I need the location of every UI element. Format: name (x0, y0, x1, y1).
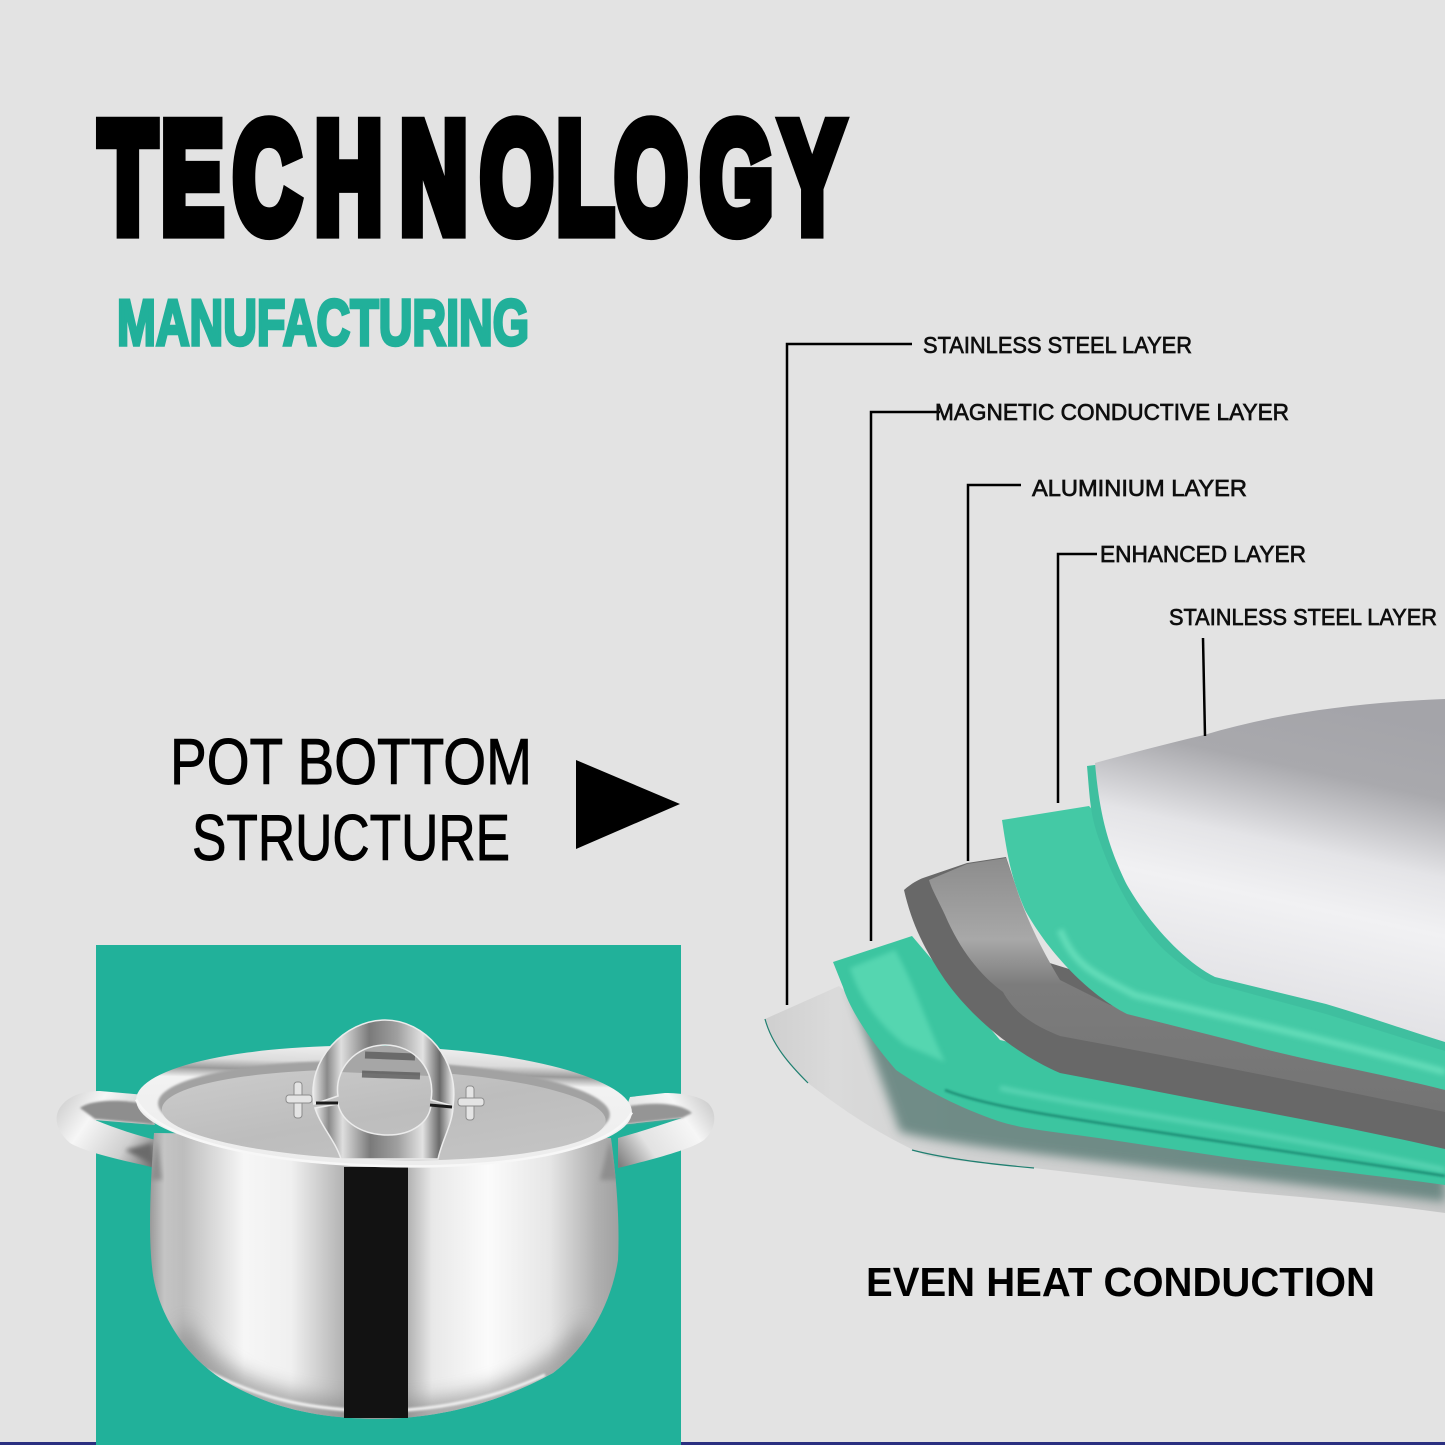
bottom navy strip (0, 1442, 1445, 1445)
ring upper arc (313, 1020, 454, 1106)
heading: pot bottom structure: STRUCTURE (192, 801, 510, 874)
heading: pot bottom structure: POT BOTTOM (170, 725, 532, 798)
panel: teal square behind pot (96, 945, 681, 1445)
layer labels: ENHANCED LAYER (1100, 541, 1306, 567)
layer labels: ALUMINIUM LAYER (1032, 475, 1247, 501)
layer labels: MAGNETIC CONDUCTIVE LAYER (935, 399, 1289, 425)
layer labels (923, 332, 1437, 630)
layer labels: STAINLESS STEEL LAYER (1169, 604, 1437, 630)
diagram: exploded pot-bottom layers (765, 699, 1445, 1213)
layer: enhanced (green) (1002, 806, 1445, 1090)
ring window reflections (340, 1046, 430, 1076)
top silver surface (1095, 699, 1445, 1042)
left handle (57, 1091, 156, 1168)
lid knob ring (286, 1020, 484, 1159)
green highlight (850, 950, 945, 1062)
layer: bottom stainless steel (765, 986, 1445, 1213)
arrow: triangle pointer (576, 760, 680, 849)
icon: stainless steel pot (57, 1020, 714, 1430)
shadow band on bottom layer (850, 985, 1445, 1202)
right handle (618, 1093, 714, 1168)
layer: magnetic conductive (green) (833, 936, 1445, 1185)
pin right (458, 1086, 484, 1120)
ring lower base (315, 1104, 453, 1159)
caption: even heat conduction: EVEN HEAT CONDUCTION (866, 1259, 1375, 1305)
layer: aluminium (gray) (904, 857, 1445, 1149)
black reflection strip (344, 1167, 408, 1418)
lid (135, 1040, 633, 1172)
pin left (286, 1082, 312, 1118)
subtitle: MANUFACTURING (117, 286, 529, 359)
green highlight (1060, 930, 1445, 1072)
body reflections (130, 1140, 625, 1430)
leader lines (787, 344, 1205, 1005)
layer labels: STAINLESS STEEL LAYER (923, 332, 1192, 358)
heading: pot bottom structure (170, 725, 532, 874)
layer: top stainless steel green edge (1087, 763, 1445, 1051)
pot body (150, 1133, 619, 1419)
edge lines of bottom layer (765, 1019, 1034, 1168)
title: TECHNOLOGY (99, 92, 843, 265)
